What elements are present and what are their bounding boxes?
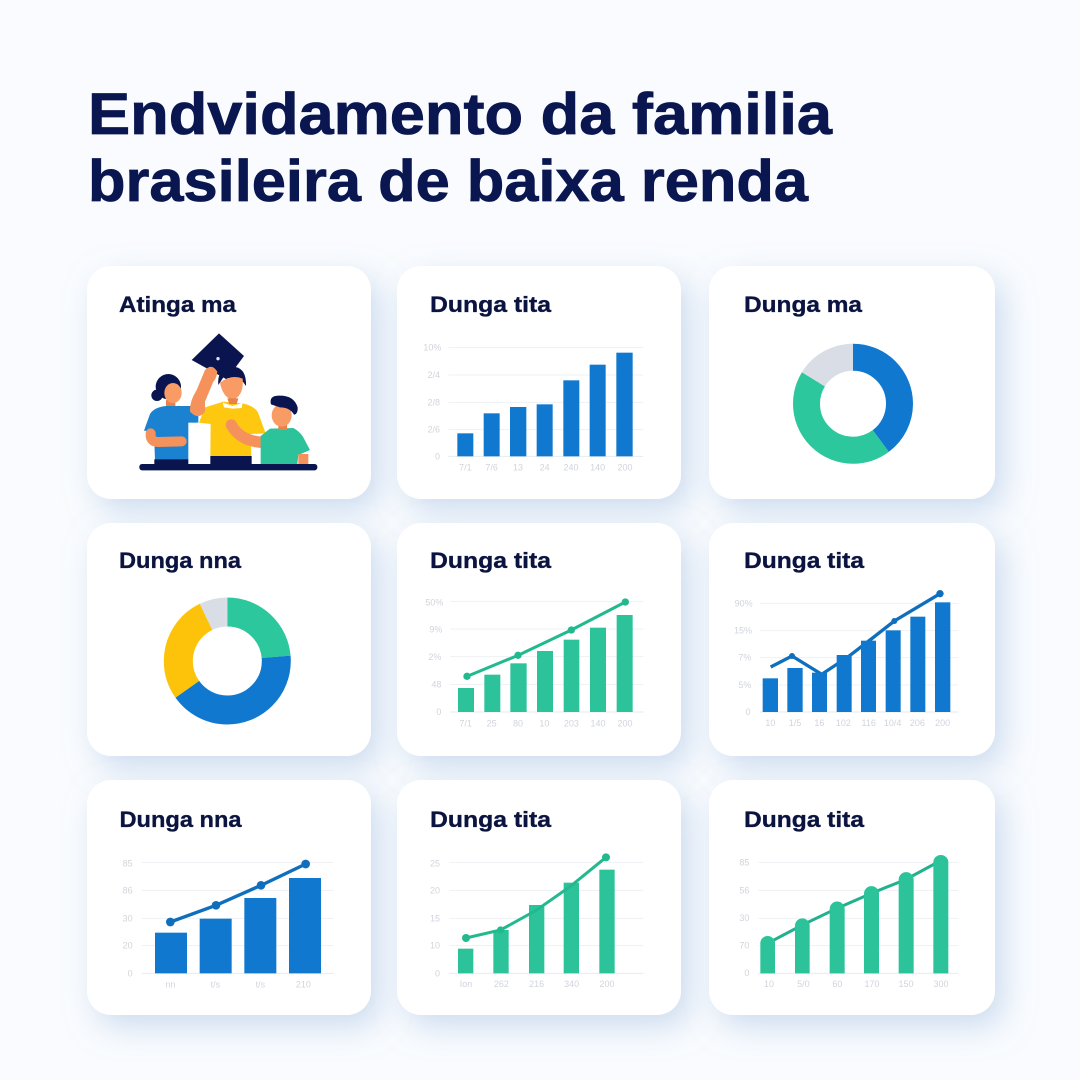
heading: Dunga ma: Dunga ma xyxy=(744,292,863,317)
combo chart xyxy=(734,590,958,728)
title: Endvidamento da familia xyxy=(88,82,833,147)
bar chart: 2/8 xyxy=(427,397,440,407)
combo chart: 203 xyxy=(564,718,579,728)
panel: green combo chart middle xyxy=(397,523,681,756)
panel: family illustration xyxy=(87,266,371,499)
combo chart: 1/5 xyxy=(789,718,801,728)
combo chart: nn xyxy=(165,979,175,989)
bar chart: 13 xyxy=(513,463,523,473)
panel: blue combo chart middle right xyxy=(709,523,995,756)
combo chart: 7/1 xyxy=(459,718,472,728)
bar chart: 2/4 xyxy=(427,370,440,380)
combo chart: 60 xyxy=(832,979,842,989)
combo chart: 0 xyxy=(744,968,749,978)
combo chart: 85 xyxy=(739,857,749,867)
panel: green combo chart bottom middle xyxy=(397,780,681,1015)
combo chart: 25 xyxy=(430,858,440,868)
combo chart: 25 xyxy=(487,718,497,728)
combo chart: 56 xyxy=(739,885,749,895)
combo chart: 210 xyxy=(296,979,311,989)
bar chart: 140 xyxy=(590,463,605,473)
combo chart: 200 xyxy=(599,979,614,989)
icon: graduation cap xyxy=(192,333,244,379)
figure: father xyxy=(188,367,266,465)
combo chart xyxy=(425,597,643,728)
combo chart: t/s xyxy=(211,979,221,989)
combo chart: 200 xyxy=(935,718,950,728)
combo chart: 10 xyxy=(764,979,774,989)
combo chart: 102 xyxy=(836,718,851,728)
combo chart: 7% xyxy=(738,653,751,663)
combo chart: 30 xyxy=(123,913,133,923)
combo chart: 85 xyxy=(123,858,133,868)
combo chart xyxy=(430,853,643,989)
combo chart: 10 xyxy=(765,718,775,728)
donut chart xyxy=(806,357,900,450)
bar chart: 2/6 xyxy=(427,425,440,435)
combo chart: 90% xyxy=(735,599,753,609)
combo chart: 10/4 xyxy=(884,718,901,728)
combo chart: 0 xyxy=(436,707,441,717)
bar chart: 200 xyxy=(617,463,632,473)
donut chart xyxy=(178,612,276,710)
combo chart: 15% xyxy=(734,626,752,636)
combo chart: 15 xyxy=(430,913,440,923)
panel: blue combo chart bottom left xyxy=(87,780,371,1015)
combo chart: 10 xyxy=(539,718,549,728)
bar chart: 7/6 xyxy=(485,463,498,473)
panel: blue bar chart top xyxy=(397,266,681,499)
combo chart: 50% xyxy=(425,597,443,607)
combo chart: 30 xyxy=(739,913,749,923)
combo chart: 0 xyxy=(128,968,133,978)
combo chart: 5/0 xyxy=(797,979,810,989)
combo chart: 206 xyxy=(910,718,925,728)
combo chart: 140 xyxy=(590,718,605,728)
combo chart: 20 xyxy=(430,886,440,896)
combo chart: 200 xyxy=(617,718,632,728)
combo chart: 9% xyxy=(429,625,442,635)
combo chart: 0 xyxy=(746,707,751,717)
combo chart: 10 xyxy=(430,941,440,951)
combo chart xyxy=(123,858,333,989)
heading: Dunga tita: Dunga tita xyxy=(430,548,552,573)
heading: Dunga tita: Dunga tita xyxy=(744,807,865,832)
bar chart: 0 xyxy=(435,451,440,461)
combo chart: 150 xyxy=(898,979,913,989)
heading: Dunga nna: Dunga nna xyxy=(120,807,242,832)
combo chart: 48 xyxy=(431,680,441,690)
bar chart: 10% xyxy=(423,343,441,353)
combo chart: Ion xyxy=(460,979,472,989)
combo chart: 170 xyxy=(864,979,879,989)
combo chart: 216 xyxy=(529,979,544,989)
combo chart xyxy=(739,855,958,989)
combo chart: 20 xyxy=(123,941,133,951)
heading: Dunga nna: Dunga nna xyxy=(119,548,242,573)
heading: Dunga tita: Dunga tita xyxy=(430,292,552,317)
bar chart xyxy=(423,343,643,473)
figure: child xyxy=(252,396,310,464)
combo chart: 5% xyxy=(738,680,751,690)
icon: family with graduation cap xyxy=(139,333,317,470)
table xyxy=(139,464,317,470)
combo chart: 2% xyxy=(428,652,441,662)
combo chart: 80 xyxy=(513,718,523,728)
heading: Dunga tita: Dunga tita xyxy=(430,807,552,832)
combo chart: 262 xyxy=(494,979,509,989)
figure: mother xyxy=(144,374,198,465)
panel: donut top right xyxy=(709,266,995,499)
combo chart: t/s xyxy=(256,979,266,989)
combo chart: 70 xyxy=(739,941,749,951)
title: brasileira de baixa renda xyxy=(88,149,809,214)
combo chart: 300 xyxy=(933,979,948,989)
panel: green combo chart bottom right xyxy=(709,780,995,1015)
bar chart: 24 xyxy=(540,463,550,473)
combo chart: 86 xyxy=(123,886,133,896)
title xyxy=(88,82,833,214)
heading: Dunga tita: Dunga tita xyxy=(744,548,865,573)
heading: Atinga ma: Atinga ma xyxy=(119,292,237,317)
combo chart: 116 xyxy=(862,718,876,728)
panel: donut middle left xyxy=(87,523,371,756)
combo chart: 340 xyxy=(564,979,579,989)
combo chart: 0 xyxy=(435,968,440,978)
bar chart: 7/1 xyxy=(459,463,472,473)
bar chart: 240 xyxy=(563,463,578,473)
combo chart: 16 xyxy=(814,718,824,728)
